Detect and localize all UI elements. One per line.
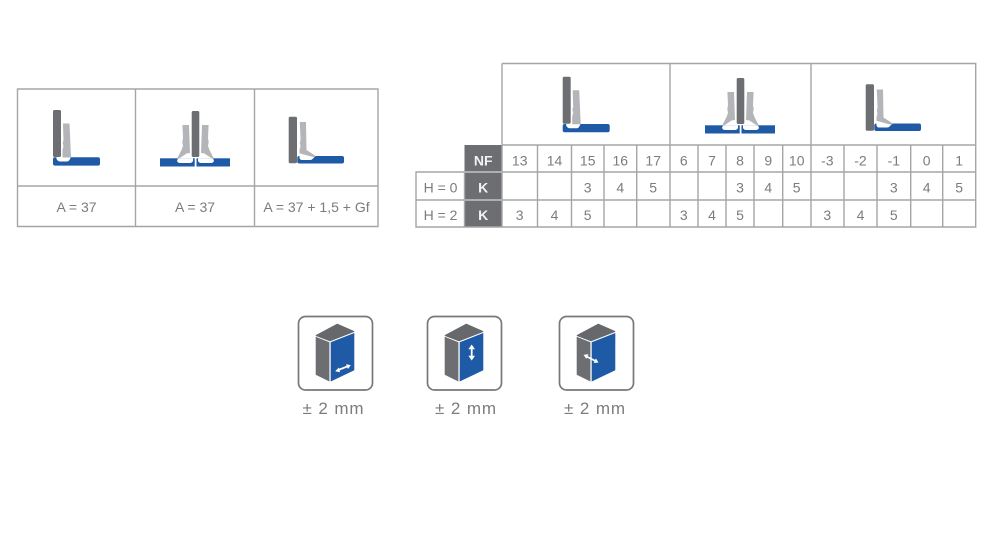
table grid <box>416 64 976 227</box>
row: K values for H = 0: 3 <box>890 179 898 195</box>
row: NF values: 10 <box>789 152 805 168</box>
label: height adjustment range: ± 2 mm <box>435 399 497 418</box>
icon: hinge on side panel, full overlay <box>53 110 100 166</box>
row: NF values: -3 <box>821 152 834 168</box>
row: K values for H = 0: 4 <box>923 179 931 195</box>
row: NF values: -2 <box>854 152 867 168</box>
row: K values for H = 2 <box>516 207 898 223</box>
row: K values for H = 2: 5 <box>890 207 898 223</box>
panel: NF and K values table <box>416 64 976 227</box>
label: depth adjustment range: ± 2 mm <box>564 399 626 418</box>
row: K values for H = 0: 3 <box>584 179 592 195</box>
row: NF values: 13 <box>512 152 528 168</box>
row: NF values: 9 <box>764 152 772 168</box>
row: K values for H = 2: 4 <box>857 207 865 223</box>
label: column 1 formula: A = 37 <box>56 199 97 215</box>
row headers: NF <box>474 152 493 168</box>
row: K values for H = 0: 5 <box>793 179 801 195</box>
icon: half overlay hinges <box>705 78 775 134</box>
icon: full overlay hinge <box>563 77 610 132</box>
row headers: K <box>478 207 488 223</box>
row headers: K <box>478 179 488 195</box>
row: NF values: 1 <box>955 152 963 168</box>
row headers: H = 2 <box>424 207 458 223</box>
icon: door with horizontal adjustment arrow <box>298 316 372 390</box>
row: K values for H = 2: 3 <box>516 207 524 223</box>
row: K values for H = 0: 4 <box>764 179 772 195</box>
row: NF values: 17 <box>645 152 661 168</box>
row: NF values: 15 <box>580 152 596 168</box>
row: NF values: 0 <box>923 152 931 168</box>
panel: side adjustment <box>298 316 372 418</box>
label: side adjustment range: ± 2 mm <box>303 399 364 418</box>
icon: door with vertical adjustment arrow <box>428 316 502 390</box>
row: K values for H = 2: 3 <box>680 207 688 223</box>
row: NF values: 6 <box>680 152 688 168</box>
row: NF values: -1 <box>888 152 900 168</box>
row headers <box>424 152 502 223</box>
header cell background: NF and K column <box>464 145 502 227</box>
label: column 3 formula: A = 37 + 1,5 + Gf <box>263 199 370 215</box>
row: K values for H = 2: 4 <box>708 207 716 223</box>
row: K values for H = 0: 5 <box>955 179 963 195</box>
row: K values for H = 0 <box>584 179 963 195</box>
row: NF values: 8 <box>736 152 744 168</box>
row: K values for H = 0: 5 <box>649 179 657 195</box>
row: K values for H = 0: 4 <box>616 179 624 195</box>
row: K values for H = 2: 3 <box>823 207 831 223</box>
row: NF values <box>512 152 963 168</box>
panel: depth adjustment <box>560 316 634 418</box>
panel: height adjustment <box>428 316 502 418</box>
row: NF values: 16 <box>613 152 628 168</box>
row: K values for H = 0: 3 <box>736 179 744 195</box>
row: K values for H = 2: 5 <box>584 207 592 223</box>
icon: hinge on side panel, inset door <box>289 117 344 164</box>
row headers: H = 0 <box>424 179 458 195</box>
label: column 2 formula: A = 37 <box>175 199 215 215</box>
row: K values for H = 2: 4 <box>551 207 559 223</box>
row: NF values: 14 <box>547 152 562 168</box>
row: NF values: 7 <box>708 152 716 168</box>
icon: door with depth adjustment arrow <box>560 316 634 390</box>
icon: inset hinge <box>866 84 921 131</box>
row: K values for H = 2: 5 <box>736 207 744 223</box>
table grid <box>18 89 378 226</box>
panel: mounting options table <box>18 89 378 226</box>
icon: two hinges on centre panel, half overlay <box>160 111 230 166</box>
